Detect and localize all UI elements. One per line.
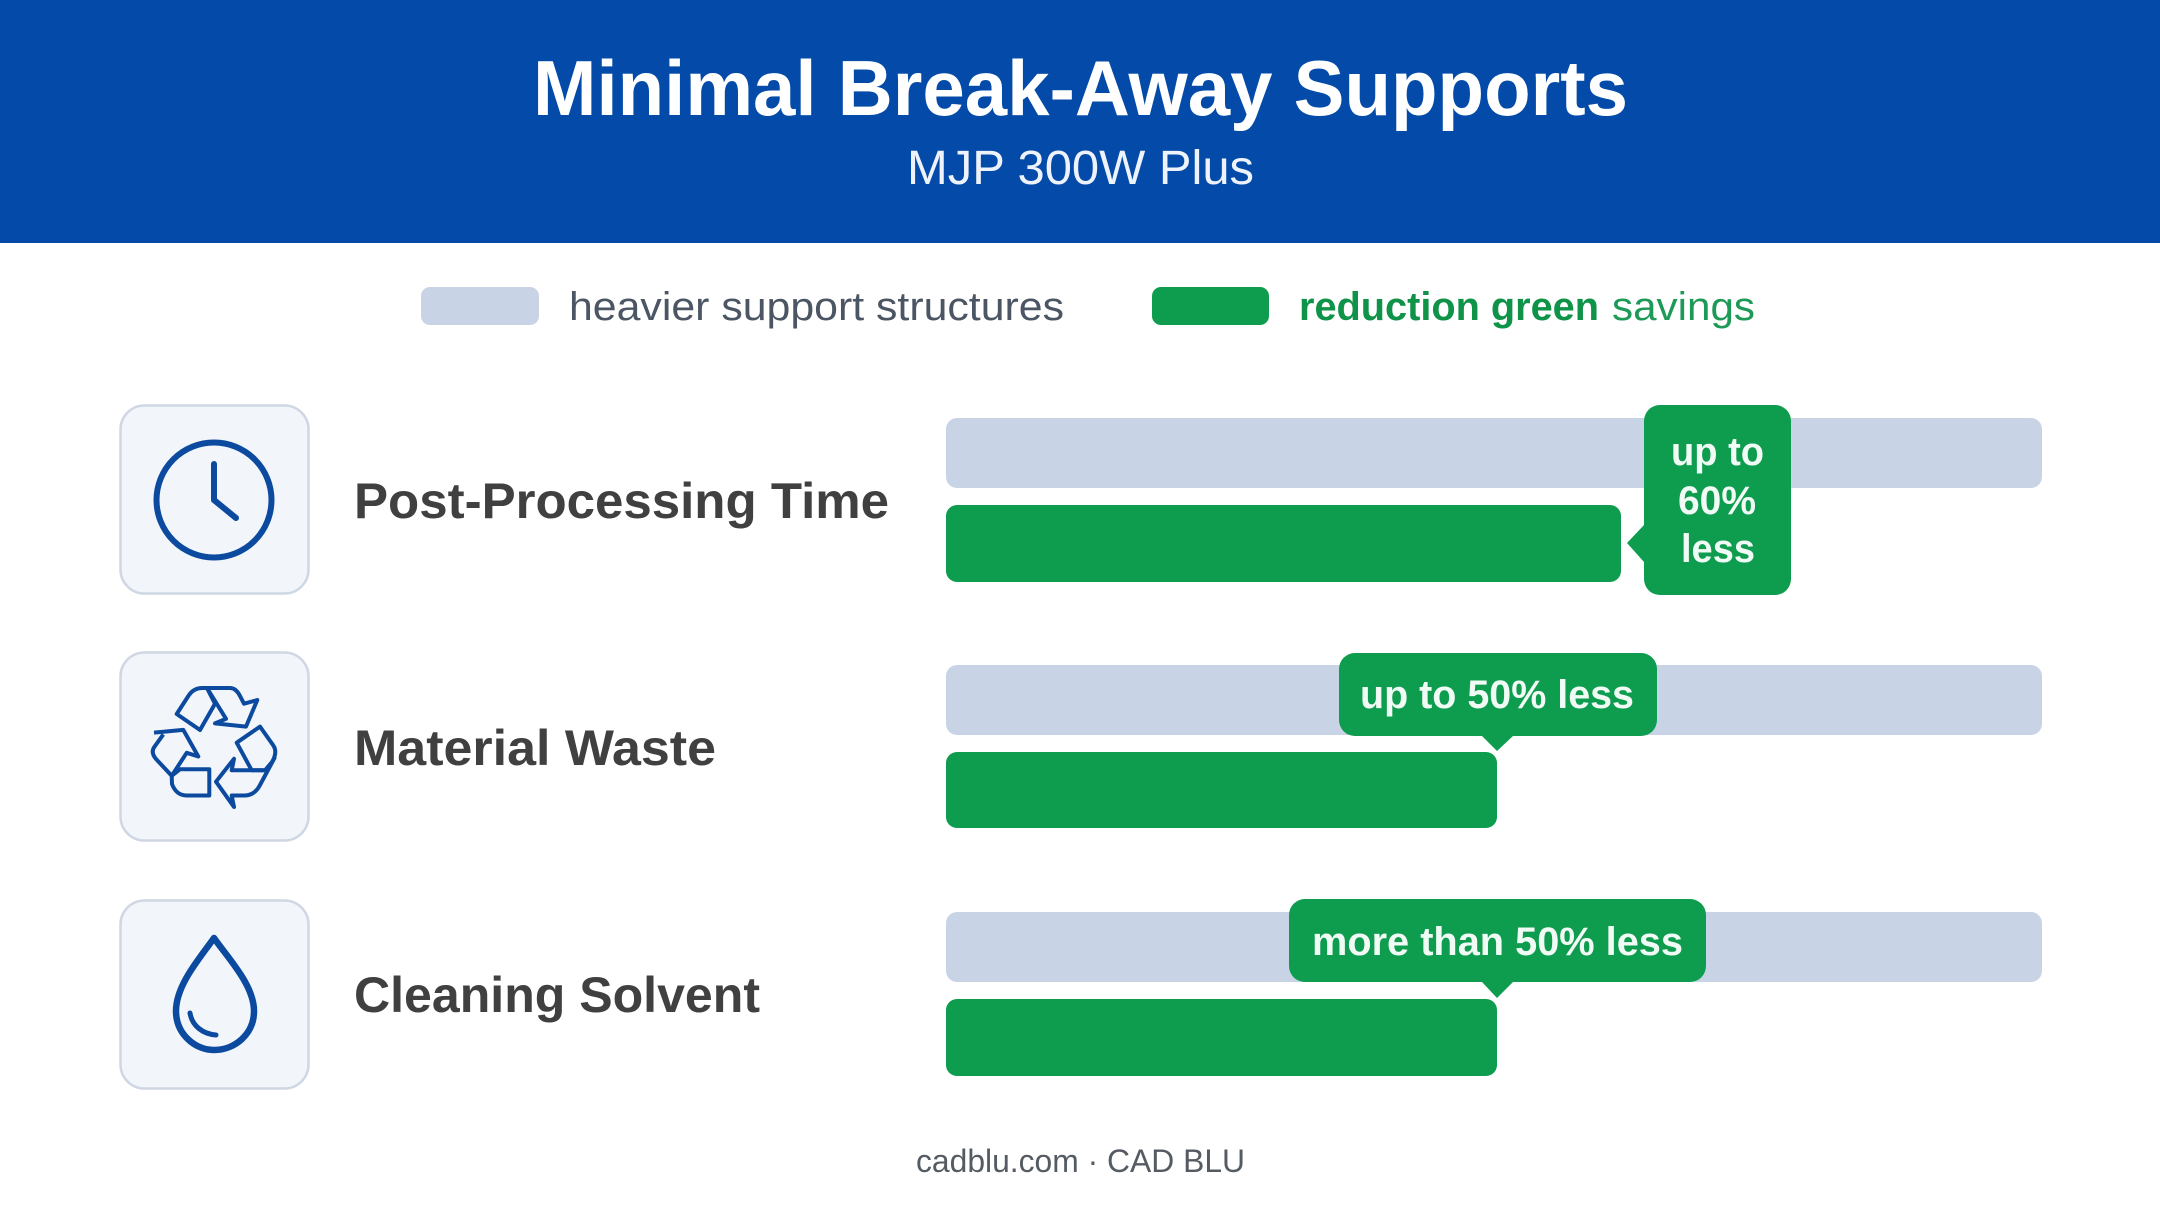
legend (421, 285, 1755, 329)
baseline bar (946, 912, 2042, 982)
reduced bar (946, 505, 1621, 582)
legend swatch: reduction green savings (1152, 287, 1269, 325)
row label: Post-Processing Time (354, 473, 889, 529)
reduced bar (946, 752, 1497, 828)
icon: clock (120, 406, 308, 594)
title: Minimal Break-Away Supports (533, 44, 1628, 132)
callout: up to 60% less: 60% (1678, 479, 1756, 523)
callout: up to 60% less: up to (1671, 430, 1764, 474)
legend label: reduction green savings: reduction green (1299, 285, 1599, 329)
row: post-processing time (120, 405, 2042, 595)
legend swatch: heavier support structures (421, 287, 539, 325)
row label: Material Waste (354, 720, 716, 776)
icon: recycle (120, 652, 308, 840)
row label: Cleaning Solvent (354, 967, 760, 1023)
callout: up to 60% less (1627, 405, 1791, 595)
baseline bar (946, 418, 2042, 488)
baseline bar (946, 665, 2042, 735)
legend label: heavier support structures: heavier support structures (569, 285, 1064, 329)
callout: up to 50% less (1339, 653, 1657, 751)
legend label: reduction green savings: savings (1612, 285, 1755, 329)
header band (0, 0, 2160, 243)
footer: cadblu.com · CAD BLU (916, 1143, 1245, 1179)
subtitle: MJP 300W Plus (907, 142, 1254, 195)
row: material waste (120, 652, 2042, 840)
icon: water drop (120, 900, 308, 1088)
callout: more than 50% less: more than 50% less (1312, 920, 1683, 964)
row: cleaning solvent (120, 899, 2042, 1088)
callout: up to 50% less: up to 50% less (1360, 673, 1634, 717)
reduced bar (946, 999, 1497, 1076)
callout: more than 50% less (1289, 899, 1706, 998)
callout: up to 60% less: less (1681, 527, 1755, 571)
